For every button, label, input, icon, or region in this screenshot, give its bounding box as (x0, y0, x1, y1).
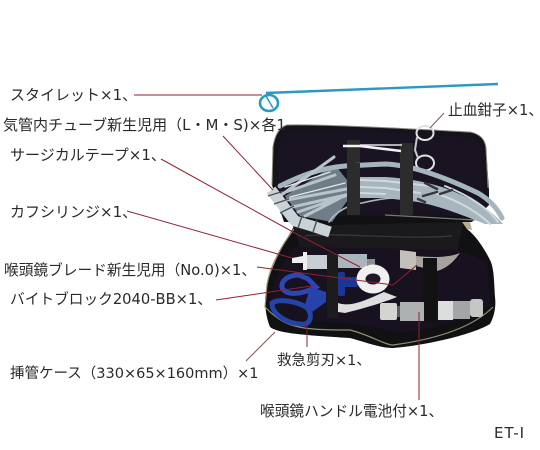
label: intubation case: 挿管ケース（330×65×160mm）×1 (10, 364, 259, 382)
bite block (338, 272, 358, 296)
label: laryngoscope blade: 喉頭鏡ブレード新生児用（No.0)×1、 (4, 261, 256, 279)
upper lid (272, 125, 489, 222)
surgical tape (356, 264, 390, 294)
leader lines (127, 95, 444, 400)
syringe (292, 252, 375, 270)
intubation kit case (265, 125, 503, 348)
endotracheal tubes (280, 157, 503, 224)
tube connectors (268, 190, 330, 232)
label: stylet: スタイレット×1、 (10, 86, 137, 104)
laryngoscope blade (400, 250, 460, 271)
product code: ET-I (494, 424, 525, 442)
scissors (272, 275, 397, 324)
lower tray (265, 215, 495, 348)
label: surgical tape: サージカルテープ×1、 (10, 146, 166, 164)
strap and laryngoscope handle (380, 258, 483, 323)
hemostat (343, 126, 434, 170)
stylet (260, 84, 498, 111)
label: bite block: バイトブロック2040-BB×1、 (10, 290, 212, 308)
label: cuff syringe: カフシリンジ×1、 (10, 203, 137, 221)
label: laryngoscope handle: 喉頭鏡ハンドル電池付×1、 (260, 403, 443, 420)
black strap (327, 253, 338, 318)
label: emergency shears: 救急剪刃×1、 (277, 351, 371, 369)
label: endotracheal tube: 気管内チューブ新生児用（L・M・S)×各1 (3, 116, 286, 134)
